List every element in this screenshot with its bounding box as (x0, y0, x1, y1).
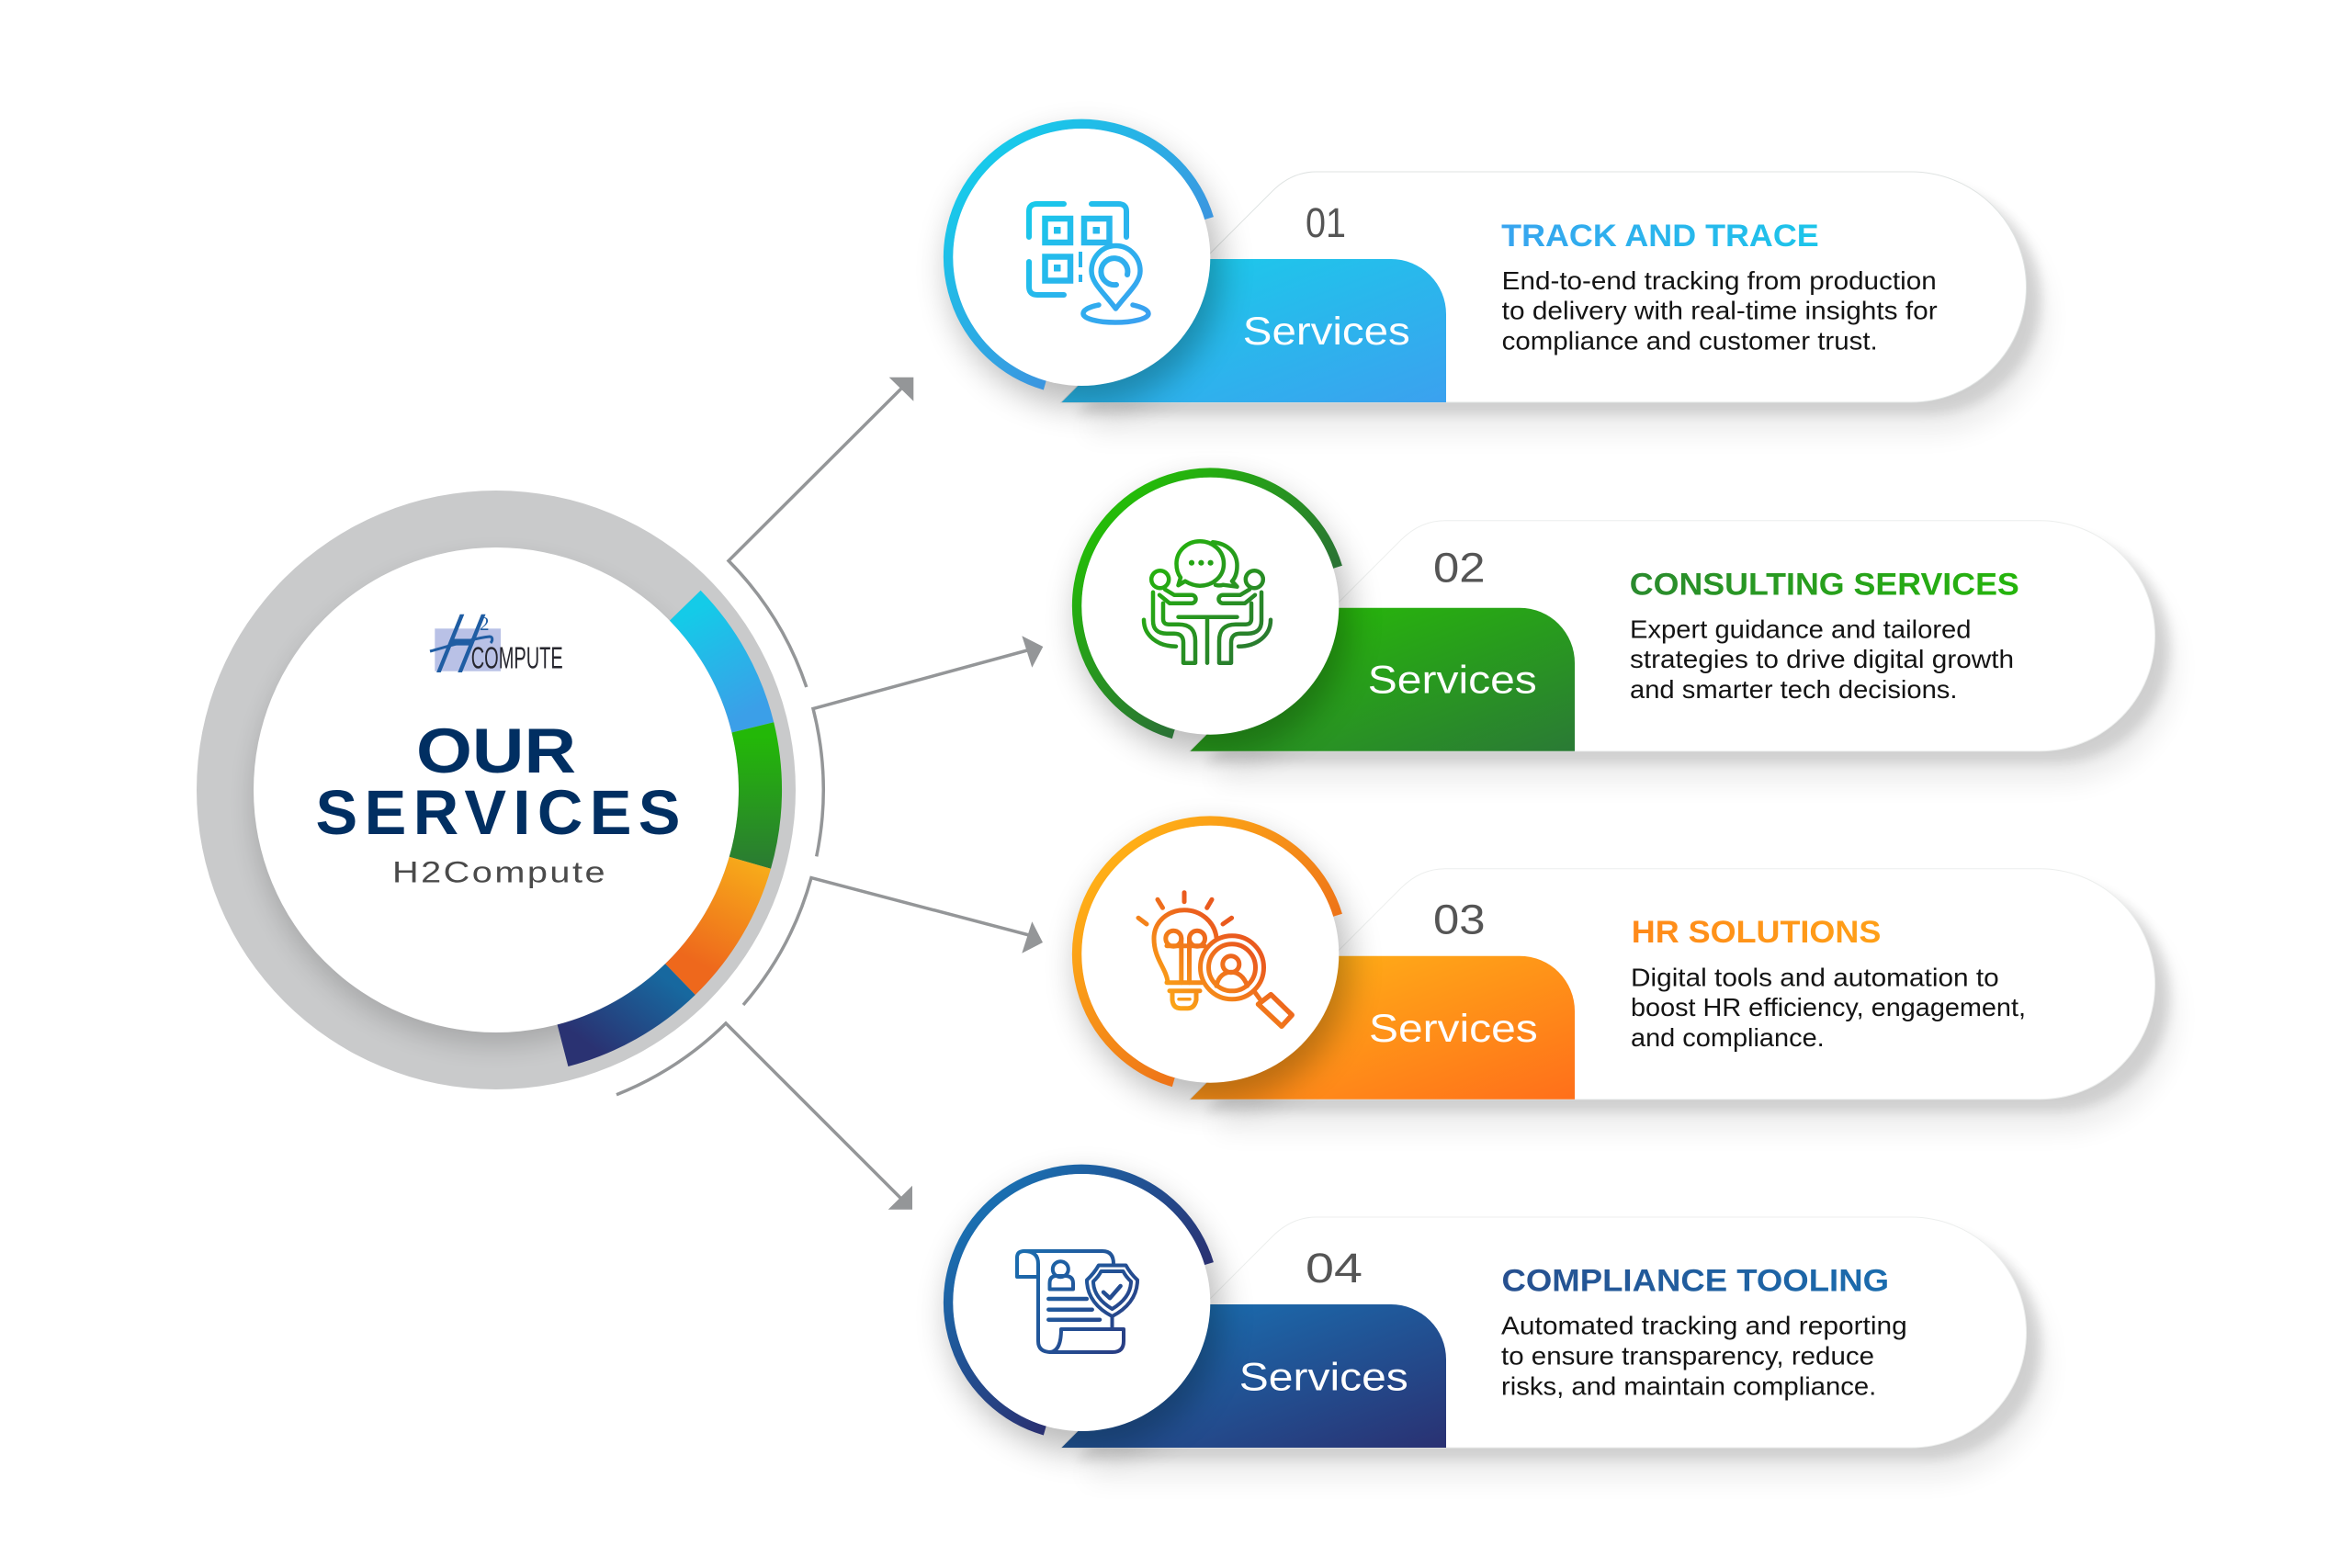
description (1631, 963, 2026, 1052)
icon: document with shield (1017, 1251, 1137, 1352)
panel: card 01 track and trace (948, 124, 2047, 434)
ring segment: navy (558, 964, 695, 1066)
ring segment: blue (670, 591, 774, 733)
ring segment: orange (665, 857, 771, 995)
description (1501, 1312, 1907, 1400)
description: to ensure transparency, reduce (1501, 1342, 1874, 1371)
number: 04 (1306, 1245, 1363, 1292)
panel: card 02 consulting services (1077, 473, 2176, 783)
description: risks, and maintain compliance. (1501, 1371, 1876, 1400)
description: strategies to drive digital growth (1630, 645, 2014, 673)
description: Digital tools and automation to (1631, 963, 1999, 991)
description: to delivery with real-time insights for (1502, 297, 1938, 325)
heading: our services (316, 716, 680, 848)
card shadow (1204, 881, 2176, 1131)
coloured tab (1191, 956, 1575, 1100)
description: Automated tracking and reporting (1501, 1312, 1907, 1340)
white inner circle (254, 547, 739, 1032)
title: HR SOLUTIONS (1632, 915, 1881, 950)
description (1630, 615, 2014, 704)
number: 03 (1433, 897, 1486, 943)
coloured tab (1191, 608, 1575, 751)
logo: H2 Compute: COMPUTE (471, 640, 563, 674)
description (1502, 266, 1938, 355)
card shadow (1204, 533, 2176, 783)
tab label: Services (1369, 1007, 1538, 1051)
white card (1190, 869, 2155, 1100)
icon circle (948, 1169, 1221, 1451)
tab label: Services (1243, 310, 1410, 354)
tab label: Services (1239, 1355, 1408, 1399)
card shadow (1076, 1229, 2047, 1479)
description: boost HR efficiency, engagement, (1631, 993, 2026, 1021)
icon circle (1077, 821, 1350, 1103)
white card (1190, 521, 2155, 751)
title: TRACK AND TRACE (1501, 219, 1819, 254)
icon: consultation meeting (1144, 541, 1271, 663)
description: End-to-end tracking from production (1502, 266, 1937, 295)
gray outer ring (197, 491, 796, 1089)
title: COMPLIANCE TOOLING (1501, 1264, 1889, 1299)
coloured tab (1062, 1304, 1446, 1448)
hub: our services circle (197, 491, 796, 1089)
number: 01 (1306, 199, 1346, 246)
ring segment: green (729, 722, 782, 869)
coloured tab (1062, 259, 1446, 402)
heading: our services: SERVICES (316, 777, 680, 848)
logo: H2 Compute: 2 (480, 613, 489, 635)
arrow to card 01 (729, 378, 913, 687)
icon: QR code with location pin (1029, 204, 1148, 322)
arrow to card 03 (743, 878, 1043, 1005)
panel: card 04 compliance tooling (948, 1169, 2047, 1479)
tab label: Services (1368, 659, 1537, 703)
card shadow (1076, 184, 2047, 434)
description: and compliance. (1631, 1023, 1825, 1052)
arrow to card 04 (616, 1023, 912, 1210)
inner circle shadow (254, 560, 739, 1045)
icon circle (948, 124, 1221, 406)
arrow to card 02 (813, 636, 1043, 856)
panel: card 03 hr solutions (1077, 821, 2176, 1131)
description: compliance and customer trust. (1502, 327, 1878, 355)
number: 02 (1433, 545, 1486, 592)
title: CONSULTING SERVICES (1630, 568, 2019, 603)
logo: H2 Compute: H (425, 596, 496, 691)
heading: our services: OUR (416, 716, 576, 786)
icon circle (1077, 473, 1350, 755)
description: Expert guidance and tailored (1630, 615, 1972, 644)
white card (1061, 1217, 2027, 1448)
subheading: H2Compute: H2Compute (392, 856, 607, 889)
description: and smarter tech decisions. (1630, 675, 1957, 704)
icon: light bulb and magnifier (1138, 893, 1292, 1026)
white card (1061, 172, 2027, 402)
